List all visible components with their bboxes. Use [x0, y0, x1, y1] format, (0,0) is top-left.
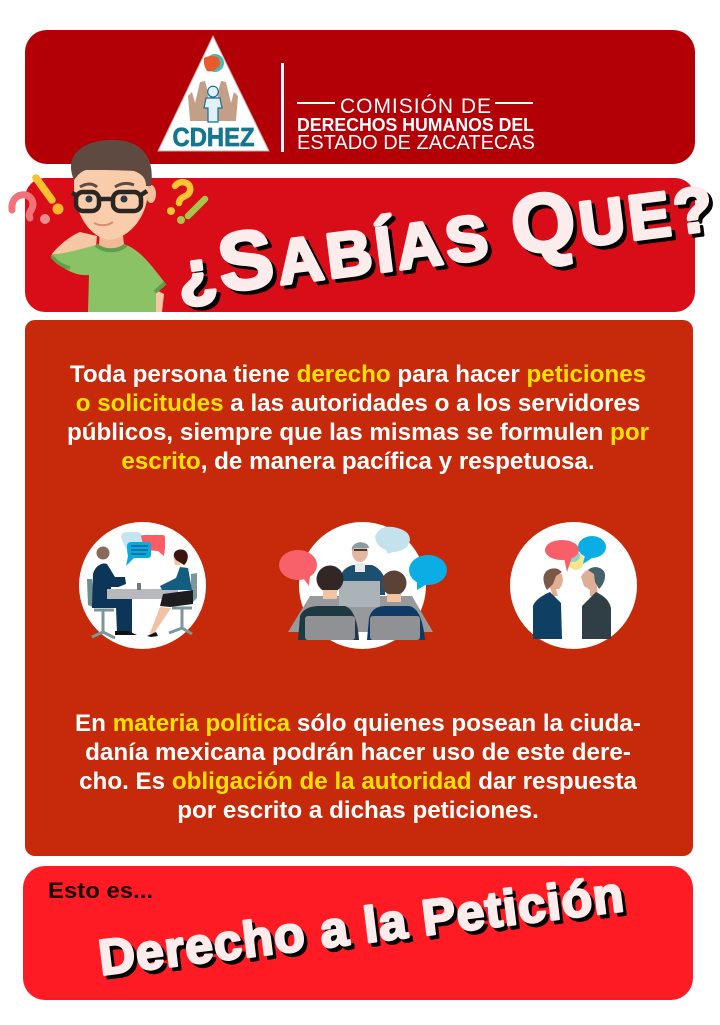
illustration: thinking man with question marks: [12, 140, 205, 312]
text: esto es: Esto es...: [48, 878, 153, 903]
icon: yellow exclamation: [36, 178, 52, 200]
text block: political matters: [75, 710, 641, 824]
icon: yellow question mark: [175, 182, 190, 203]
icon: green exclamation: [188, 199, 205, 216]
organisation name: ESTADO DE ZACATECAS: [297, 132, 535, 154]
text block: political matters: por escrito a dichas peticiones.: [177, 797, 539, 824]
heading: derecho a la petición: Derecho a la Petición: [96, 866, 626, 986]
logo: CDHEZ triangle: [158, 36, 269, 152]
panel: header: [25, 30, 695, 164]
man: hair: [71, 140, 152, 186]
panel: main content: [25, 320, 693, 856]
text block: right of petition: escrito, de manera pacífica y respetuosa.: [121, 448, 595, 475]
man: glasses: [72, 191, 147, 211]
organisation name: COMISIÓN DE: [340, 95, 491, 118]
icon: group meeting with presenter: [279, 522, 447, 649]
icon: meeting across a table: [79, 522, 206, 649]
logo: CDHEZ triangle: CDHEZ: [172, 124, 254, 152]
text block: political matters: cho. Es obligación de la autoridad dar respuesta: [79, 768, 637, 795]
panel: sabías que banner: [25, 178, 695, 312]
heading: ¿Sabías que? shadow and text: ¿SABÍAS QUE?: [175, 161, 720, 318]
text block: political matters: En materia política sólo quienes posean la ciuda-: [75, 710, 641, 737]
text block: right of petition: públicos, siempre que las mismas se formulen por: [67, 419, 650, 446]
man: neck: [99, 225, 124, 250]
man: arm and hand: [52, 232, 97, 262]
heading: ¿Sabías que? shadow and text: ¿SABÍAS QUE?: [171, 157, 717, 315]
organisation name: DERECHOS HUMANOS DEL: [297, 114, 534, 135]
man: face: [74, 165, 148, 240]
heading: derecho a la petición: Derecho a la Petición: [99, 870, 630, 990]
text block: political matters: danía mexicana podrán hacer uso de este dere-: [85, 739, 631, 766]
text block: right of petition: o solicitudes a las autoridades o a los servidores: [76, 390, 640, 417]
man: shirt: [51, 245, 165, 312]
icon: red question mark: [12, 195, 33, 218]
icon: two men talking: [510, 522, 637, 649]
logo divider: [281, 63, 284, 152]
organisation name: [297, 95, 535, 154]
text block: right of petition: [67, 361, 650, 475]
panel: footer: [23, 866, 693, 1000]
text block: right of petition: Toda persona tiene derecho para hacer peticiones: [70, 361, 646, 388]
